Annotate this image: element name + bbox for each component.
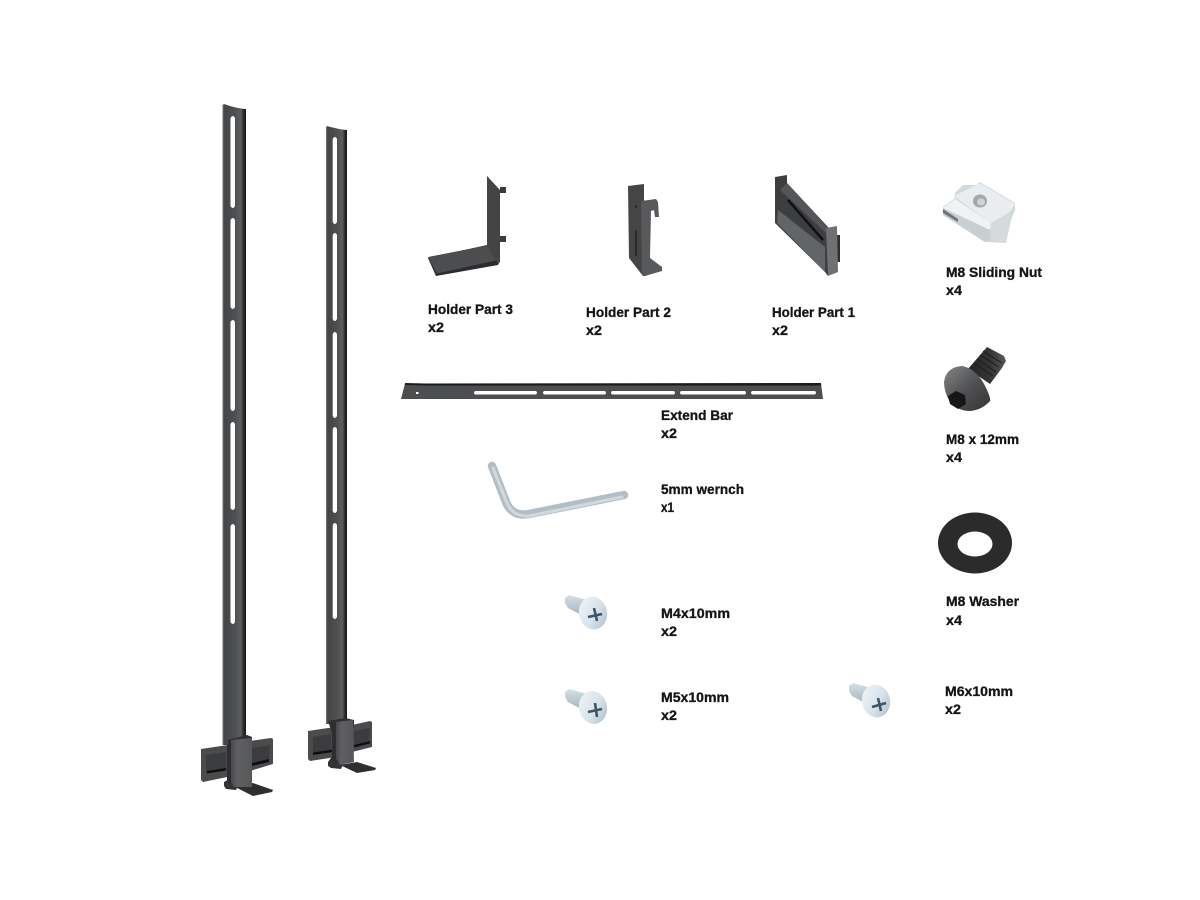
- label: M6x10mm: x2: [945, 701, 961, 717]
- label: holder part 3: x2: [428, 319, 444, 335]
- icon: holder part 3: [428, 176, 506, 276]
- icon: screw: [565, 688, 610, 727]
- icon: screw: [849, 682, 893, 720]
- label: wrench: [661, 481, 744, 515]
- icon: washer: [938, 512, 1012, 574]
- part: M8 Washer: [938, 512, 1020, 628]
- label: M4x10mm: [661, 605, 730, 639]
- label: bolt: M8 x 12mm: [946, 431, 1019, 447]
- label: holder part 2: Holder Part 2: [586, 304, 671, 320]
- part: M8 x 12mm bolt: [944, 347, 1019, 465]
- label: M6x10mm: M6x10mm: [945, 683, 1013, 699]
- label: M5x10mm: M5x10mm: [661, 689, 729, 705]
- label: M4x10mm: M4x10mm: [661, 605, 730, 621]
- part: M4x10mm screw: [565, 594, 730, 639]
- part: M8 Sliding Nut: [943, 182, 1042, 298]
- part: Extend Bar: [401, 383, 823, 441]
- upright bar body: [222, 104, 246, 745]
- label: holder part 1: x2: [772, 322, 788, 338]
- icon: sliding nut: [943, 182, 1015, 243]
- label: extend bar: [661, 407, 734, 441]
- upright bar body: [326, 126, 347, 724]
- icon: button head bolt: [944, 347, 1006, 411]
- label: sliding nut: [946, 264, 1042, 298]
- label: M5x10mm: [661, 689, 729, 723]
- label: extend bar: x2: [661, 425, 677, 441]
- icon: screw: [565, 594, 610, 632]
- label: M4x10mm: x2: [661, 623, 677, 639]
- label: holder part 2: x2: [586, 322, 602, 338]
- bracket assembly left: [201, 735, 273, 796]
- part: M5x10mm screw: [565, 688, 729, 727]
- part: 5mm wrench: [492, 466, 744, 516]
- icon: hex wrench: [492, 466, 624, 516]
- label: washer: x4: [946, 612, 962, 628]
- label: bolt: [946, 431, 1019, 465]
- bracket assembly right: [308, 718, 376, 773]
- label: extend bar: Extend Bar: [661, 407, 734, 423]
- part: M6x10mm screw: [849, 682, 1013, 720]
- part: Holder Part 3: [428, 176, 513, 335]
- part: Holder Part 1: [772, 175, 855, 338]
- label: M5x10mm: x2: [661, 707, 677, 723]
- panel: upright bar right: [308, 126, 376, 773]
- label: holder part 3: [428, 301, 513, 335]
- label: washer: [946, 593, 1020, 628]
- label: holder part 1: Holder Part 1: [772, 304, 855, 320]
- label: bolt: x4: [946, 449, 962, 465]
- label: M6x10mm: [945, 683, 1013, 717]
- icon: extend bar: [401, 383, 823, 399]
- label: holder part 2: [586, 304, 671, 338]
- label: washer: M8 Washer: [946, 593, 1020, 609]
- icon: holder part 2: [628, 184, 662, 276]
- label: holder part 1: [772, 304, 855, 338]
- panel: upright bar left: [201, 104, 273, 796]
- label: sliding nut: x4: [946, 282, 962, 298]
- label: wrench: 5mm wernch: [661, 481, 744, 497]
- label: holder part 3: Holder Part 3: [428, 301, 513, 317]
- label: sliding nut: M8 Sliding Nut: [946, 264, 1042, 280]
- icon: holder part 1: [775, 175, 840, 276]
- label: wrench: x1: [661, 499, 674, 515]
- part: Holder Part 2: [586, 184, 671, 338]
